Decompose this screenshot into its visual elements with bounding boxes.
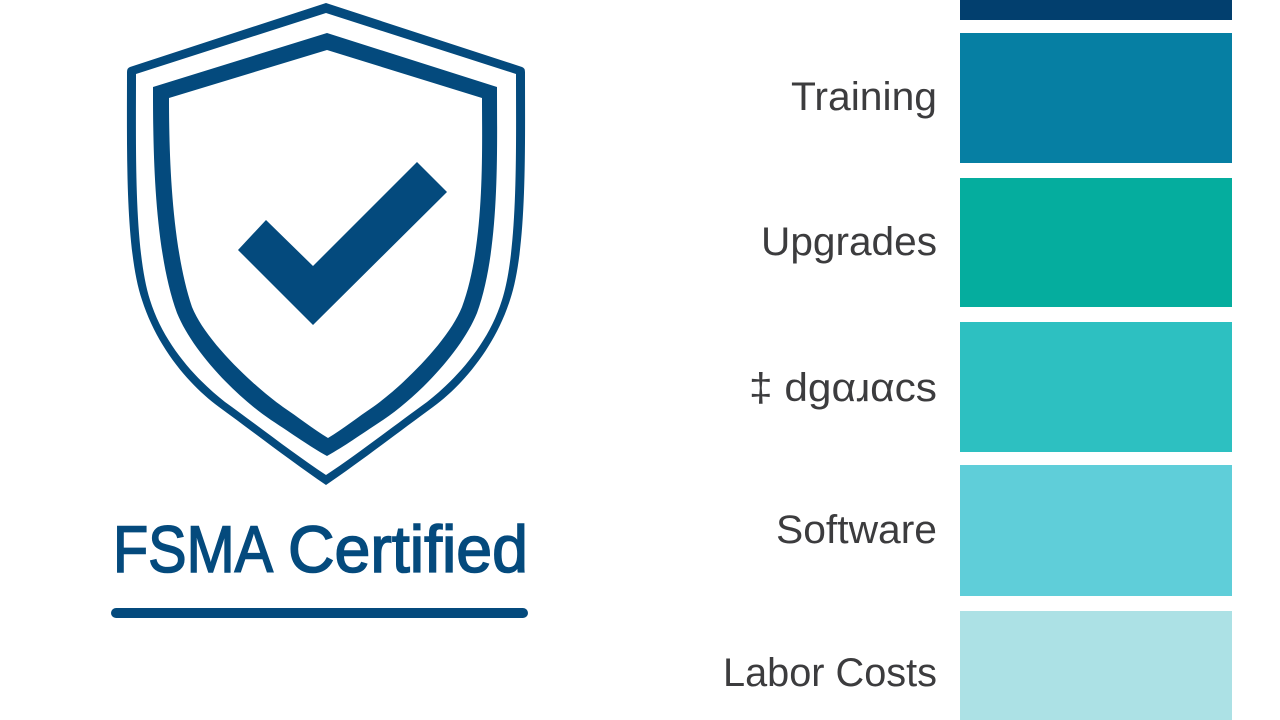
bar: Labor Costs xyxy=(960,611,1232,720)
bar: Upgrades xyxy=(960,178,1232,307)
heading: FSMA Certified: Certified xyxy=(288,512,528,586)
shield inner band xyxy=(153,33,497,456)
label: Software: Software xyxy=(776,508,937,552)
heading: FSMA Certified: FSMA xyxy=(113,512,273,586)
label: Labor Costs: Labor Costs xyxy=(723,651,937,695)
bar: top segment xyxy=(960,0,1232,20)
label: garbled third label: ‡ dgαɹαcs xyxy=(749,366,937,410)
heading: FSMA Certified xyxy=(113,512,528,586)
heading underline xyxy=(111,608,528,618)
bar: Software xyxy=(960,465,1232,596)
label: Upgrades: Upgrades xyxy=(761,220,937,264)
checkmark xyxy=(238,162,447,325)
icon: shield with checkmark xyxy=(127,3,525,485)
shield outer outline xyxy=(127,3,525,485)
bar: Training xyxy=(960,33,1232,163)
bar: third label segment xyxy=(960,322,1232,452)
stacked bar chart xyxy=(960,0,1232,720)
label: Training: Training xyxy=(791,75,937,119)
